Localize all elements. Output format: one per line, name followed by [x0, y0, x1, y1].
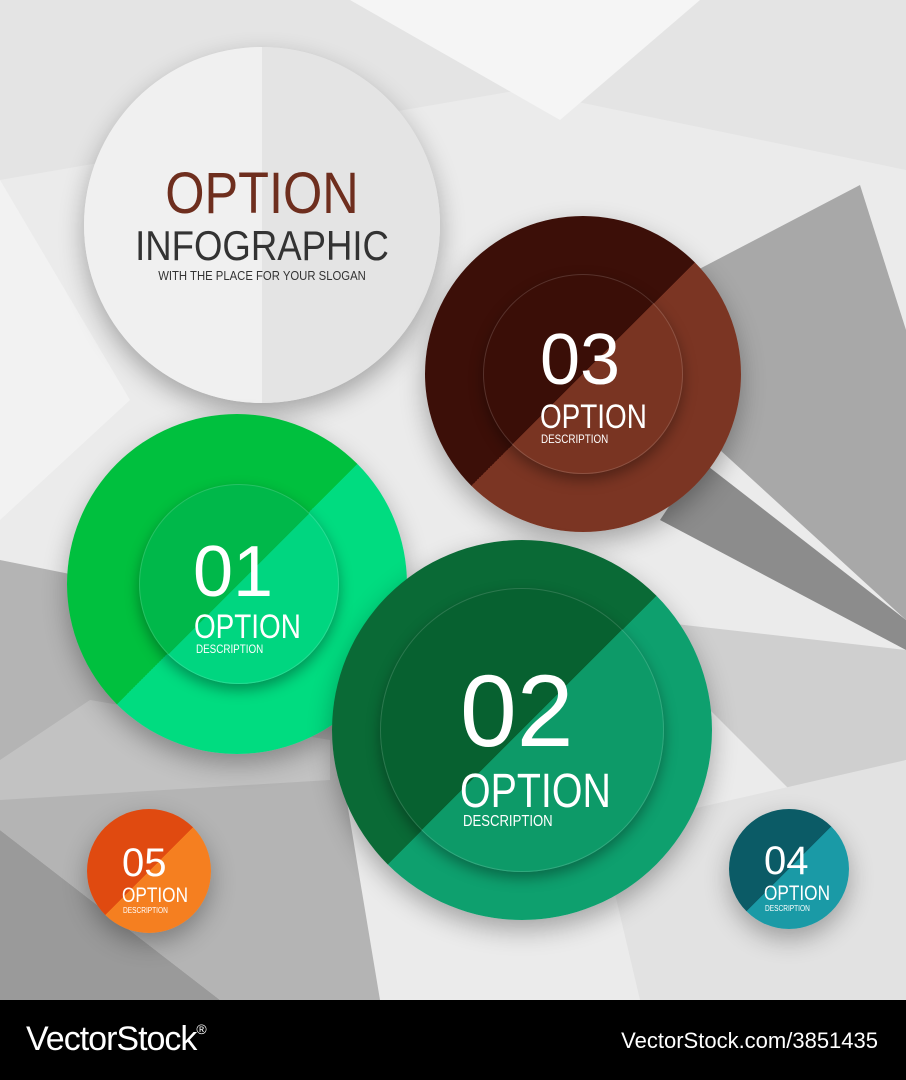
circle 05: DESCRIPTION [123, 906, 168, 915]
label 05: 05 [122, 841, 166, 885]
brand: VectorStock® [26, 1020, 206, 1058]
label 03: 03 [540, 320, 620, 400]
title heading: OPTION [165, 161, 359, 226]
circle 02 [332, 540, 712, 920]
circle 04: DESCRIPTION [765, 904, 810, 913]
circle 01 [67, 414, 407, 754]
label 01: 01 [193, 532, 273, 612]
image id: VectorStock.com/3851435 [621, 1028, 878, 1053]
circle 03: DESCRIPTION [541, 432, 608, 446]
circle 03 [425, 216, 741, 532]
circle 04: OPTION [764, 882, 830, 905]
circle 01: OPTION [194, 608, 301, 646]
footer bar [0, 1000, 906, 1080]
title circle [84, 47, 440, 403]
circle 05: OPTION [122, 884, 188, 907]
slogan: WITH THE PLACE FOR YOUR SLOGAN [158, 268, 366, 283]
circle 04 [729, 809, 849, 929]
subtitle: INFOGRAPHIC [135, 222, 389, 269]
circle 03: OPTION [540, 398, 647, 436]
circle 01: DESCRIPTION [196, 642, 263, 656]
label 04: 04 [764, 839, 808, 883]
circle 02: DESCRIPTION [463, 813, 553, 830]
circle 05 [87, 809, 211, 933]
circle 02: OPTION [460, 765, 611, 818]
label 02: 02 [460, 654, 573, 768]
